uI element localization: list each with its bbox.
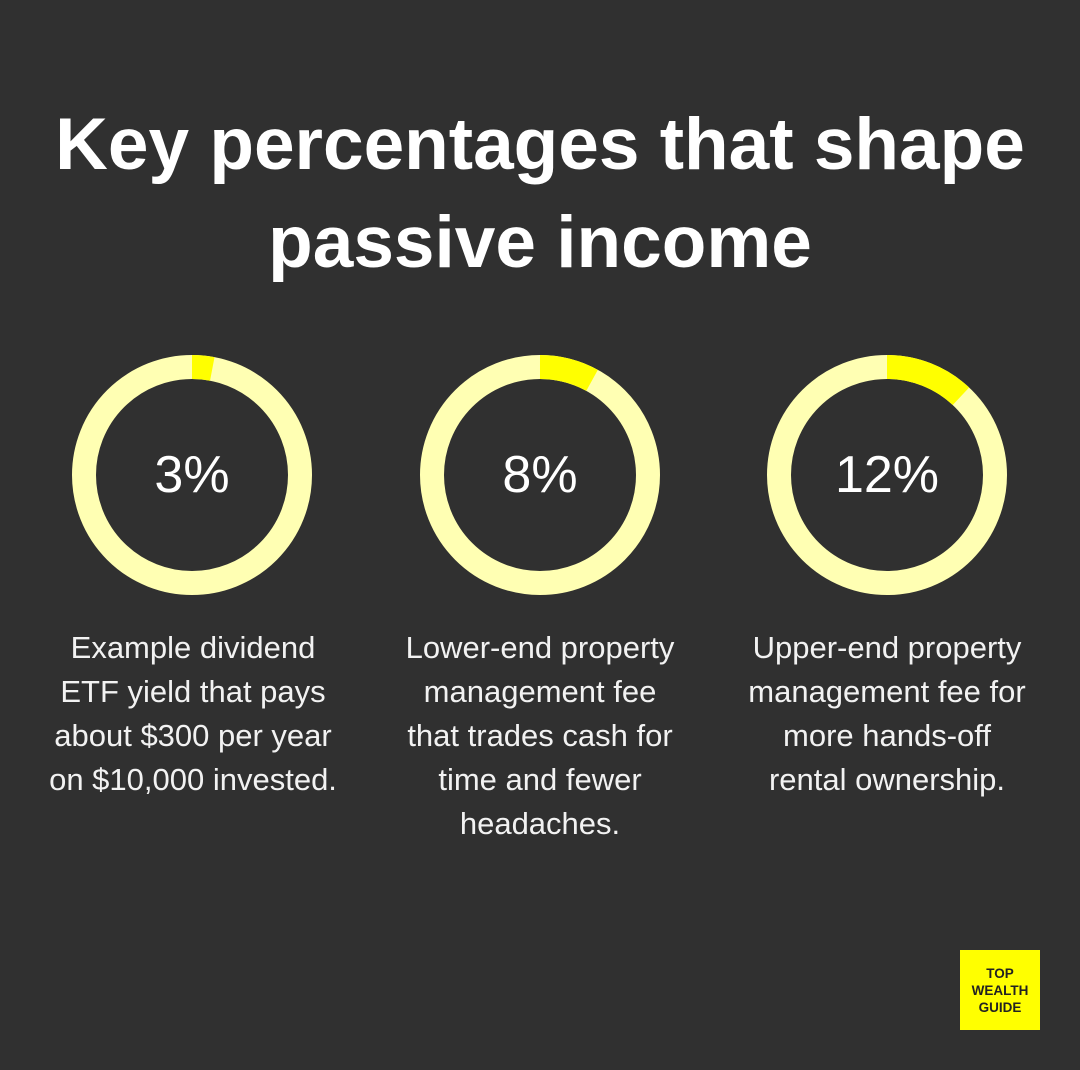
text: 12% description: more hands-off	[783, 718, 991, 753]
donut: 8%: 8%	[502, 446, 578, 504]
title: Key percentages that shape	[55, 104, 1025, 185]
logo: WEALTH	[972, 982, 1028, 998]
text: 3% description: Example dividend	[71, 630, 315, 665]
donut: 3%	[72, 355, 312, 595]
text: 12% description: management fee for	[748, 674, 1026, 709]
text: 3% description	[49, 630, 337, 797]
logo	[960, 950, 1040, 1030]
donut: 3%: 3%	[154, 446, 230, 504]
donut: 12%	[767, 355, 1007, 595]
text: 12% description	[748, 630, 1026, 797]
logo: GUIDE	[979, 1000, 1021, 1014]
text: 3% description: on $10,000 invested.	[49, 762, 337, 797]
text: 8% description: Lower-end property	[406, 630, 674, 665]
text: 12% description: rental ownership.	[769, 762, 1005, 797]
text: 8% description: time and fewer	[438, 762, 642, 797]
title: passive income	[268, 202, 812, 283]
logo: TOP	[986, 966, 1014, 980]
text: 3% description: about $300 per year	[54, 718, 332, 753]
text: 8% description: management fee	[424, 674, 656, 709]
text: 8% description: headaches.	[460, 806, 620, 841]
donut: 8%	[420, 355, 660, 595]
text: 8% description	[406, 630, 674, 841]
text: 12% description: Upper-end property	[753, 630, 1021, 665]
title	[55, 104, 1025, 283]
donut: 12%: 12%	[835, 446, 939, 504]
text: 8% description: that trades cash for	[407, 718, 673, 753]
text: 3% description: ETF yield that pays	[60, 674, 326, 709]
